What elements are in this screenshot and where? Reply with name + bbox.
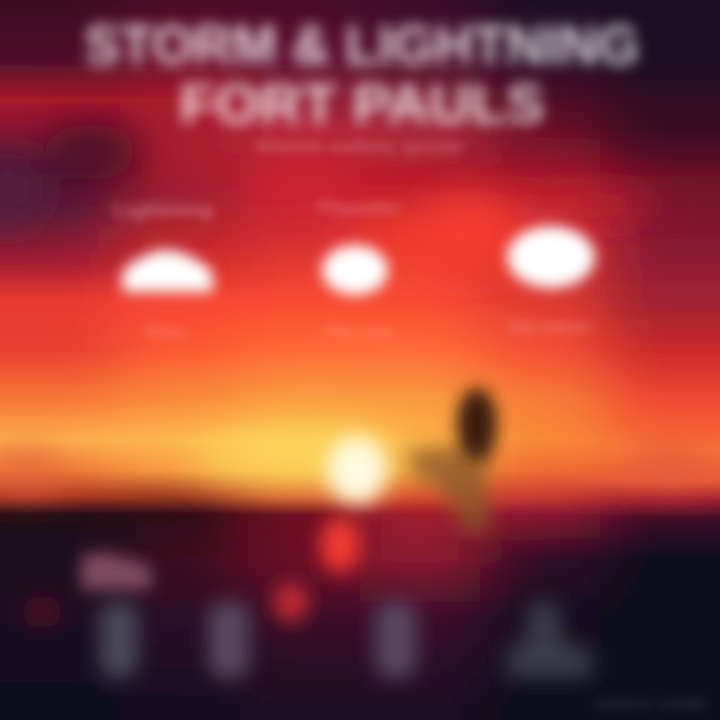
ground red reflections xyxy=(22,517,360,628)
icon: bottom marker one xyxy=(100,602,138,678)
panel: cloud two xyxy=(316,198,400,340)
icon: bottom marker two xyxy=(209,602,249,678)
icon: bottom marker three xyxy=(376,602,416,678)
title xyxy=(84,13,640,135)
footer heading xyxy=(80,552,152,590)
cloud two label: Thunder xyxy=(316,198,400,218)
icon: bottom marker four xyxy=(506,602,592,678)
panel: cloud three xyxy=(507,203,595,336)
cloud three label: Rain xyxy=(520,203,580,220)
title line 2: FORT PAULS xyxy=(180,72,544,135)
icon: cloud one xyxy=(122,250,213,292)
icon: cloud three xyxy=(507,226,595,288)
title line 1: STORM & LIGHTNING xyxy=(84,13,640,76)
silhouette: figure against the sun xyxy=(410,388,497,530)
cloud one caption: Stay xyxy=(145,323,186,340)
panel: cloud one xyxy=(113,200,213,340)
subtitle: Storm safety guide xyxy=(255,139,465,156)
cloud one label: Lightning xyxy=(113,200,213,220)
footer credit: source credit xyxy=(595,695,705,711)
setting sun glow xyxy=(190,436,410,504)
cloud two caption: Take cover xyxy=(325,323,395,340)
cloud three caption: Stay indoors xyxy=(508,319,593,336)
icon: cloud two xyxy=(322,245,388,295)
